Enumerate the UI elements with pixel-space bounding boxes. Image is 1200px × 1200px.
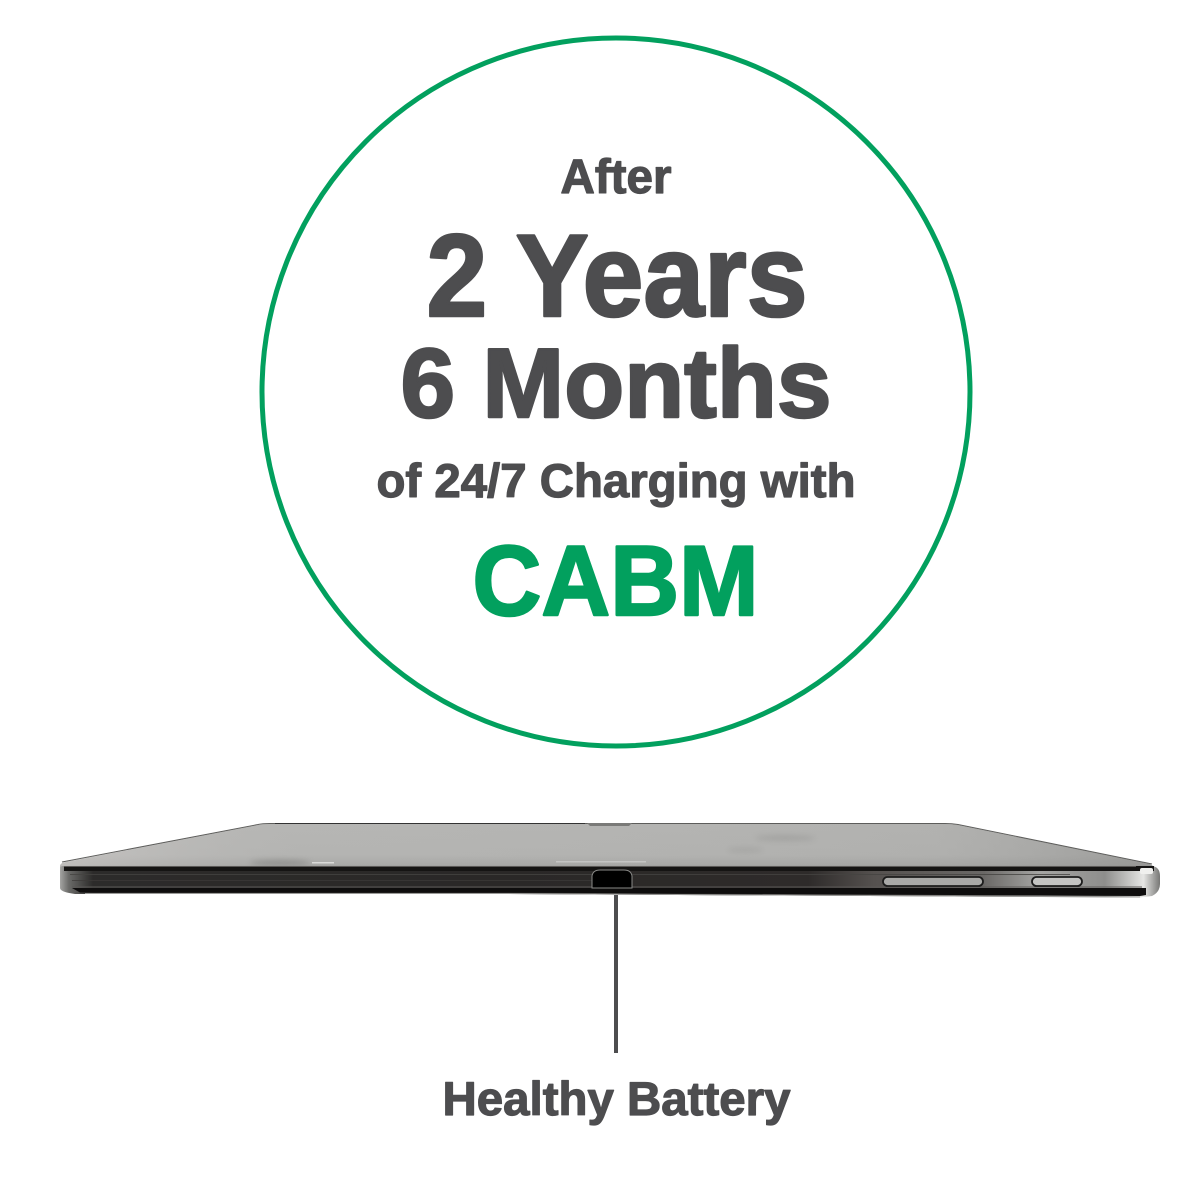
text: 6 Months: 6 Months bbox=[400, 328, 832, 438]
badge circle bbox=[262, 38, 970, 746]
charging port bbox=[592, 870, 632, 888]
text: CABM: CABM bbox=[472, 525, 758, 636]
pointer line bbox=[614, 895, 618, 1053]
text: 2 Years: 2 Years bbox=[426, 210, 808, 341]
tablet side view bbox=[60, 823, 1160, 898]
text: After: After bbox=[560, 150, 672, 204]
label: Healthy Battery: Healthy Battery bbox=[442, 1073, 791, 1126]
volume button long bbox=[883, 877, 983, 886]
tablet body band bbox=[60, 866, 1160, 898]
text: of 24/7 Charging with: of 24/7 Charging with bbox=[376, 455, 856, 508]
tablet screen surface bbox=[60, 824, 1156, 868]
volume button short bbox=[1032, 877, 1082, 886]
chrome corner highlight bbox=[1140, 868, 1153, 874]
